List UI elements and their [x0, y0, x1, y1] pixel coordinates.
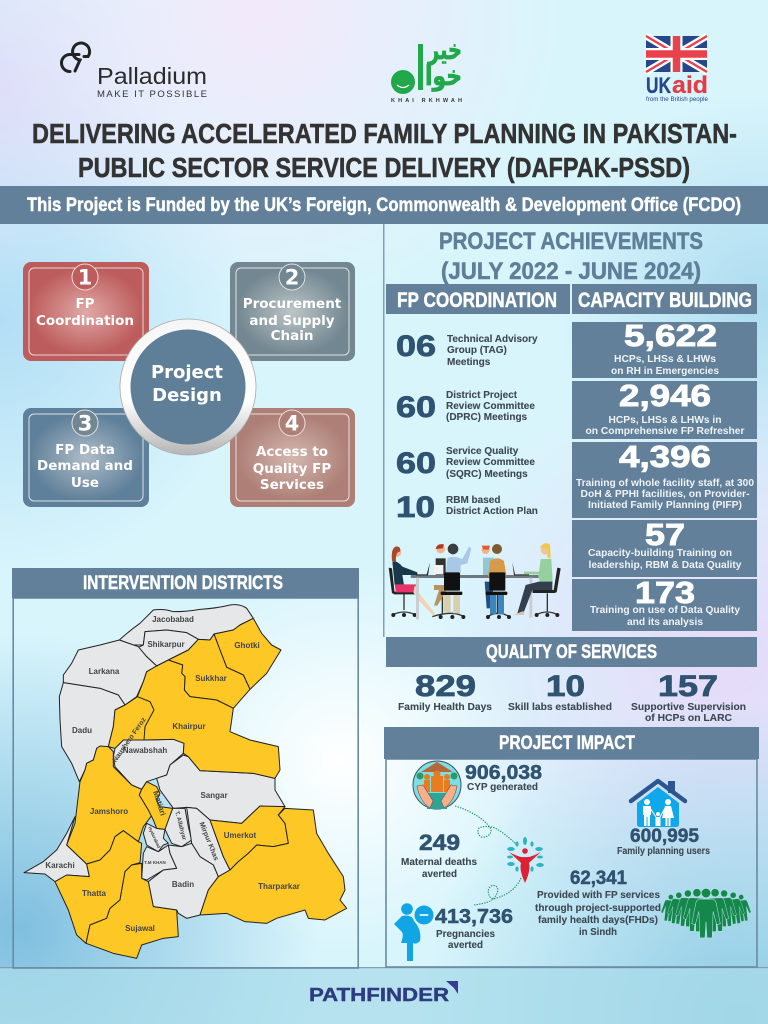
stat: 57 [572, 517, 757, 577]
stat: DPRC meetings [396, 390, 535, 424]
map labels: Larkana [89, 667, 120, 676]
stat: pregnancies: averted [448, 940, 483, 951]
panel: quality of services [386, 637, 757, 724]
center circle [120, 319, 256, 455]
map labels: Sujawal [125, 924, 155, 933]
stat: FHD clients: in Sindh [579, 927, 617, 938]
card 3: FP Data: Demand and [37, 458, 133, 474]
map labels: T.M KHAN [144, 860, 166, 865]
map labels: Sukkhar [195, 674, 227, 683]
stat: DPRC meetings: District Project [446, 390, 518, 401]
card 1: FP Coordination [23, 262, 149, 361]
card 3: FP Data: 3 [78, 412, 92, 436]
stat: CYP: 906,038 [465, 762, 542, 784]
stat: 4,396 [572, 439, 757, 518]
panel: project impact [384, 727, 759, 967]
icon: pregnant woman [394, 903, 434, 961]
stat: 4,396: Initiated Family Planning (PIFP) [588, 500, 742, 511]
stat: SQRC meetings [396, 446, 535, 480]
stat: TAG meetings [396, 330, 538, 368]
logo: UK aid [646, 36, 709, 103]
stat: family health days: Family Health Days [398, 702, 492, 713]
card 4: Access: Services [260, 477, 324, 493]
illustration: meeting [389, 543, 561, 619]
stat: 173: and its analysis [627, 617, 703, 628]
card 1: FP Coordination: Coordination [36, 313, 134, 329]
stat: skill labs [508, 670, 612, 713]
card 3: FP Data: FP Data [55, 442, 115, 458]
stat: SQRC meetings: Service Quality [446, 446, 519, 457]
stat: 4,396: Training of whole facility staff, at 300 [576, 478, 754, 489]
card 2: Procurement: Chain [271, 328, 313, 344]
icon: family in hands [413, 761, 461, 809]
stat: RBM plan: RBM based [446, 495, 500, 506]
map labels: Thatta [82, 889, 107, 898]
heading: FP COORDINATION [397, 288, 557, 312]
map labels: Hyderabad [147, 826, 162, 849]
stat: DPRC meetings: Review Committee [446, 401, 535, 412]
logo: UK aid: UK [646, 73, 671, 98]
stat: TAG meetings: Group (TAG) [447, 345, 507, 356]
stat: 173: Training on use of Data Quality [590, 605, 740, 616]
map labels: Karachi [45, 861, 75, 870]
stat: maternal deaths: 249 [419, 830, 460, 855]
map labels: Nawabshah [123, 746, 167, 755]
panel: intervention districts [12, 568, 359, 968]
map labels: Badin [172, 880, 194, 889]
stat: CYP [465, 762, 542, 793]
map labels: Sangar [200, 791, 228, 800]
stat: TAG meetings: 06 [396, 330, 436, 363]
stat: supportive supervision: of HCPs on LARC [645, 713, 732, 724]
stat: skill labs: Skill labs established [508, 702, 612, 713]
stat: FHD clients: family health days(FHDs) [538, 915, 658, 926]
stat: 2,946 [572, 378, 757, 439]
map labels [45, 615, 300, 933]
stat: 2,946: 2,946 [619, 378, 711, 413]
funding banner [0, 186, 768, 224]
card 3: FP Data [23, 408, 149, 507]
center circle: Design [152, 385, 222, 406]
stat: SQRC meetings: (SQRC) Meetings [446, 469, 528, 480]
stat: 5,622: 5,622 [624, 318, 717, 353]
heading: INTERVENTION DISTRICTS [83, 572, 283, 594]
card 4: Access: Access to [256, 444, 328, 460]
stat: 57: leadership, RBM & Data Quality [588, 560, 742, 571]
front right [492, 544, 502, 554]
stat: SQRC meetings: Review Committee [446, 457, 535, 468]
map labels: Jamshoro [90, 807, 128, 816]
right woman [541, 545, 550, 555]
panel: FP coordination [386, 284, 570, 619]
seated back row [436, 545, 445, 553]
heading [384, 727, 759, 759]
stat: DPRC meetings: (DPRC) Meetings [446, 412, 528, 423]
stat: FHD clients: 62,341 [570, 868, 627, 889]
stat: 4,396: DoH & PPHI facilities, on Provider- [580, 489, 750, 500]
stat: 4,396: 4,396 [619, 439, 711, 474]
icon: crowd [660, 888, 752, 938]
map labels: Jacobabad [152, 615, 194, 624]
stat: 173 [572, 575, 757, 631]
stat: 2,946: HCPs, LHSs & LHWs in [608, 415, 722, 426]
stat: maternal deaths: averted [422, 869, 457, 880]
heading: project achievements: PROJECT ACHIEVEMENTS [439, 228, 703, 255]
stat: supportive supervision: Supportive Supervision [631, 702, 746, 713]
stat: pregnancies: 413,736 [435, 906, 513, 928]
map labels: Dadu [72, 726, 92, 735]
stat: pregnancies [435, 906, 513, 951]
stat: 173: 173 [635, 575, 695, 610]
left woman [392, 561, 417, 585]
stat: family health days [398, 670, 492, 713]
card 4: Access [230, 408, 355, 507]
map of Sindh [24, 605, 347, 958]
map labels: Shikarpur [147, 640, 185, 649]
stat: DPRC meetings: 60 [396, 391, 436, 424]
map labels: Naushero Feroz [112, 716, 148, 764]
map labels: Umerkot [224, 831, 257, 840]
heading [386, 637, 757, 667]
map labels: Tharparkar [258, 882, 300, 891]
map labels: Ghotki [234, 641, 260, 650]
map labels: Matiari [151, 790, 168, 817]
logo: Khair Khwah: KHAI RKHWAH [391, 98, 462, 104]
arrow: dotted path top [455, 806, 518, 846]
logo: Khair Khwah: خیر [427, 35, 462, 66]
logo: UK aid: aid [672, 72, 708, 99]
title [32, 118, 737, 183]
stat: FHD clients [535, 868, 661, 938]
center circle: Project [151, 362, 223, 383]
heading: PROJECT IMPACT [499, 732, 635, 754]
stat: maternal deaths [401, 830, 477, 880]
stat: FP users [617, 826, 710, 857]
heading: QUALITY OF SERVICES [486, 642, 657, 663]
panel: capacity building [572, 284, 757, 631]
card 2: Procurement: Procurement [243, 296, 342, 312]
stat: FP users: Family planning users [617, 846, 710, 857]
card 2: Procurement: and Supply [249, 313, 335, 329]
stat: maternal deaths: Maternal deaths [401, 857, 477, 868]
stat: 5,622: HCPs, LHSs & LHWs [614, 354, 716, 365]
heading: project achievements [439, 228, 703, 285]
stat: FP users: 600,995 [630, 826, 699, 847]
stat: FHD clients: Provided with FP services [537, 890, 660, 901]
logo: Khair Khwah [391, 35, 462, 104]
icon: family house [631, 781, 685, 827]
stat: RBM plan [396, 491, 538, 524]
heading [12, 568, 359, 598]
stat: 5,622 [572, 318, 757, 378]
stat: 57: Capacity-building Training on [588, 548, 732, 559]
stat: TAG meetings: Meetings [447, 357, 491, 368]
logo: Palladium [62, 43, 207, 100]
stat: CYP: CYP generated [467, 782, 538, 793]
map labels: Mirpur Khas [197, 821, 219, 862]
stat: 57: 57 [645, 517, 685, 552]
heading: project achievements: (JULY 2022 - JUNE 2024) [441, 258, 701, 285]
standing front left [448, 544, 458, 554]
card 2: Procurement: 2 [285, 266, 299, 290]
stat: supportive supervision [631, 670, 746, 724]
stat: supportive supervision: 157 [658, 670, 718, 703]
panel: project design [23, 262, 355, 507]
table [411, 575, 539, 578]
arrow: dotted path bottom [474, 878, 521, 905]
stat: FHD clients: through project-supported [535, 903, 661, 914]
card 1: FP Coordination: 1 [78, 266, 92, 290]
stat: RBM plan: 10 [396, 491, 435, 524]
stat: pregnancies: Pregnancies [436, 929, 495, 940]
stat: 2,946: on Comprehensive FP Refresher [586, 426, 745, 437]
logo: Pathfinder [309, 981, 458, 1005]
stat: 5,622: on RH in Emergencies [611, 366, 719, 377]
card 4: Access: 4 [285, 412, 299, 436]
card 2: Procurement [230, 262, 355, 361]
icon: woman with leaves [507, 837, 544, 883]
logo: UK aid: from the British people [646, 97, 709, 103]
stat: SQRC meetings: 60 [396, 447, 436, 480]
logo: Khair Khwah: خوا [425, 61, 462, 92]
map labels: Khairpur [172, 722, 206, 731]
map labels: T. Allahyar [173, 811, 187, 842]
stat: family health days: 829 [415, 670, 476, 703]
stat: skill labs: 10 [546, 670, 585, 703]
logo: Palladium: Palladium [97, 63, 207, 89]
logo: Pathfinder: PATHFINDER [309, 985, 449, 1005]
stat: RBM plan: District Action Plan [446, 506, 538, 517]
logo: Palladium: MAKE IT POSSIBLE [97, 89, 207, 100]
card 4: Access: Quality FP [253, 461, 331, 477]
card 1: FP Coordination: FP [75, 296, 95, 312]
heading [386, 284, 570, 314]
stat: TAG meetings: Technical Advisory [447, 334, 538, 345]
card 3: FP Data: Use [71, 475, 99, 491]
